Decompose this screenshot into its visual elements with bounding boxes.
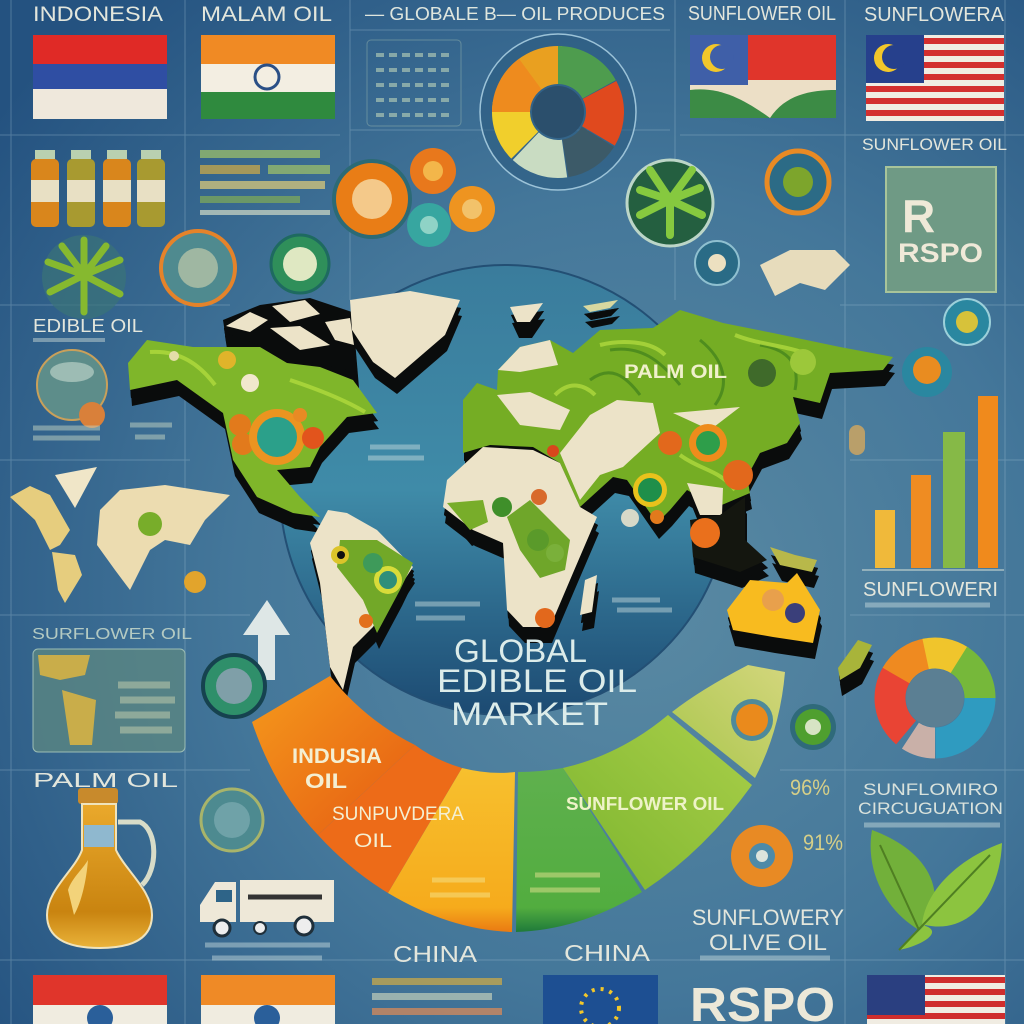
map: West Africa green: [447, 500, 488, 530]
panel: small map card: [33, 649, 185, 752]
flag stripes: [33, 35, 167, 119]
title: Global Edible Oil Market: MARKET: [451, 696, 608, 732]
segment: light green: [563, 715, 752, 890]
doughnut: market share segments: [252, 665, 785, 932]
panel: garbled mini legend: [200, 150, 330, 215]
label: palm oil bottom left: PALM OIL: [33, 770, 178, 792]
icon: circular seed badge: [201, 789, 263, 851]
label: percentages: 96%: [790, 775, 830, 800]
flag body: [866, 35, 1004, 121]
icon: small cream map fragment: [760, 250, 850, 296]
panel: RSPO certificate: [862, 135, 1007, 292]
label: sunflower certification: SUNFLOMIRO: [863, 780, 998, 799]
label: RSPO: RSPO: [898, 238, 983, 268]
label: India oil: INDUSIA: [292, 745, 382, 768]
flag: Indonesia header: [33, 3, 167, 119]
arrow: upward: [243, 600, 290, 680]
bar chart: rising bars: [862, 396, 1004, 570]
label: sunflowery olive oil: SUNFLOWERY: [692, 905, 844, 930]
map: Australia: [727, 573, 820, 643]
label: R logo: R: [902, 190, 935, 242]
heading: sunflower oil: SUNFLOWER OIL: [688, 3, 836, 25]
map: Africa: [443, 447, 597, 627]
map: Scandinavia cream: [498, 340, 558, 372]
map: Southeast Asia: [690, 497, 767, 572]
map: Eurasia: [463, 310, 893, 523]
small world map left: [10, 467, 230, 603]
map: Middle East and Central Asia: [560, 400, 660, 500]
title: Global Edible Oil Market: EDIBLE OIL: [437, 663, 637, 699]
map: Eurasia leaf texture: [590, 340, 796, 405]
heading: sunflowera: SUNFLOWERA: [864, 4, 1005, 26]
icon: green ring badge: [271, 235, 329, 293]
icons: circular food badges: [334, 148, 495, 247]
label: percentages: [790, 775, 843, 855]
icon: palm tree badge: [627, 160, 713, 246]
segment: green: [516, 768, 642, 932]
label: China right: CHINA: [564, 940, 651, 966]
map: Tibet cream: [673, 407, 740, 430]
map: Central Africa green: [507, 500, 570, 578]
map markers: [169, 349, 816, 628]
icon: green badge right of ring: [790, 704, 836, 750]
icon: palm tree illustration: [42, 235, 126, 319]
map: small island north: [510, 303, 543, 322]
map: Greenland: [350, 291, 460, 378]
icon: orange badge right of ring: [731, 699, 773, 741]
label: palm oil on map: PALM OIL: [624, 362, 727, 383]
label: India oil: OIL: [305, 770, 347, 793]
label: sunflower certification: CIRCUGUATION: [858, 799, 1003, 818]
label: sunflower: SUNFLOWERI: [863, 579, 998, 601]
map: South America green: [337, 540, 413, 633]
panel: small data table: [367, 40, 461, 126]
heading: global edible oil producers: — GLOBALE B— OIL PRODUCES: [365, 4, 665, 24]
map: Europe cream: [497, 392, 570, 430]
segment: India oil: [252, 676, 415, 835]
icon: tan capsule: [849, 425, 865, 455]
label: sunflower oil: SUNFLOWER OIL: [862, 135, 1007, 154]
label: sunflower certification: [858, 780, 1003, 818]
globe circle: [280, 265, 730, 715]
icon: four oil bottles: [31, 150, 165, 227]
flag: Malaysia header: [864, 4, 1005, 121]
label: sunflower oil in orange: OIL: [354, 831, 392, 852]
icon: delivery truck: [200, 880, 334, 936]
icon: seed circle: [33, 350, 172, 438]
label: sunflower oil in orange: SUNPUVDERA: [332, 804, 464, 825]
icon: green ring arrow badge: [203, 655, 265, 717]
label: sunflower oil left: SURFLOWER OIL: [32, 626, 192, 643]
icon: right side orange badge: [902, 347, 952, 397]
map: New Zealand: [838, 640, 872, 680]
segment: sunflower oil orange: [318, 745, 462, 893]
map: Madagascar: [580, 575, 597, 615]
icon: orange sunflower wheel: [731, 825, 793, 887]
segment: yellow green: [672, 665, 785, 778]
map: South America: [310, 510, 413, 690]
icon: small seed badge: [695, 241, 739, 285]
flag stripes: [201, 35, 335, 119]
label: sunflower oil in orange: [332, 804, 464, 852]
map: Arctic archipelago: [223, 298, 357, 372]
flag: India bottom centre-left: [201, 975, 335, 1024]
flag: India bottom left: [33, 975, 167, 1024]
label: India oil: [292, 745, 382, 793]
heading: Indonesia: INDONESIA: [33, 3, 163, 26]
map: Eurasia light texture: [150, 335, 810, 490]
flag body: [690, 35, 836, 118]
text block: bars under edible oil: [33, 338, 105, 342]
flag: USA: [867, 975, 1005, 1024]
text block: tiny lines in yellow and green segments: [430, 875, 600, 895]
world map: [128, 291, 893, 690]
chart: top segmented donut: [480, 34, 636, 190]
icon: green leaves: [871, 830, 1002, 950]
label: percentages: 91%: [803, 830, 843, 855]
chart: right multi-coloured donut: [872, 635, 998, 761]
title: Global Edible Oil Market: [437, 633, 637, 732]
flag: Malaysia-style header: [688, 3, 836, 118]
icon: oil jug: [47, 788, 154, 948]
label: sunflowery olive oil: [692, 905, 844, 955]
map: small island north east: [583, 300, 618, 312]
segment: yellow: [388, 768, 515, 932]
label: sunflower oil in green: SUNFLOWER OIL: [566, 794, 724, 814]
label: China left: CHINA: [393, 941, 478, 967]
heading: Malam oil: MALAM OIL: [201, 3, 332, 26]
map: North America: [128, 340, 377, 517]
flag: India header: [201, 3, 335, 119]
label: sunflowery olive oil: OLIVE OIL: [709, 930, 827, 955]
label: edible oil: EDIBLE OIL: [33, 316, 143, 336]
text block: bottom small lines: [372, 978, 502, 1015]
icon: right side teal badge: [944, 299, 990, 345]
map: India cream: [687, 483, 723, 515]
text block: small lines on globe and sides: [205, 447, 1000, 958]
map: Indonesia islands: [770, 547, 817, 572]
icon: orange ring badge: [767, 151, 829, 213]
flag: EU: [543, 975, 658, 1024]
icon: orange ring leaf badge: [161, 231, 235, 305]
title: Global Edible Oil Market: GLOBAL: [454, 633, 587, 669]
map: Arctic cream islands: [226, 300, 354, 350]
